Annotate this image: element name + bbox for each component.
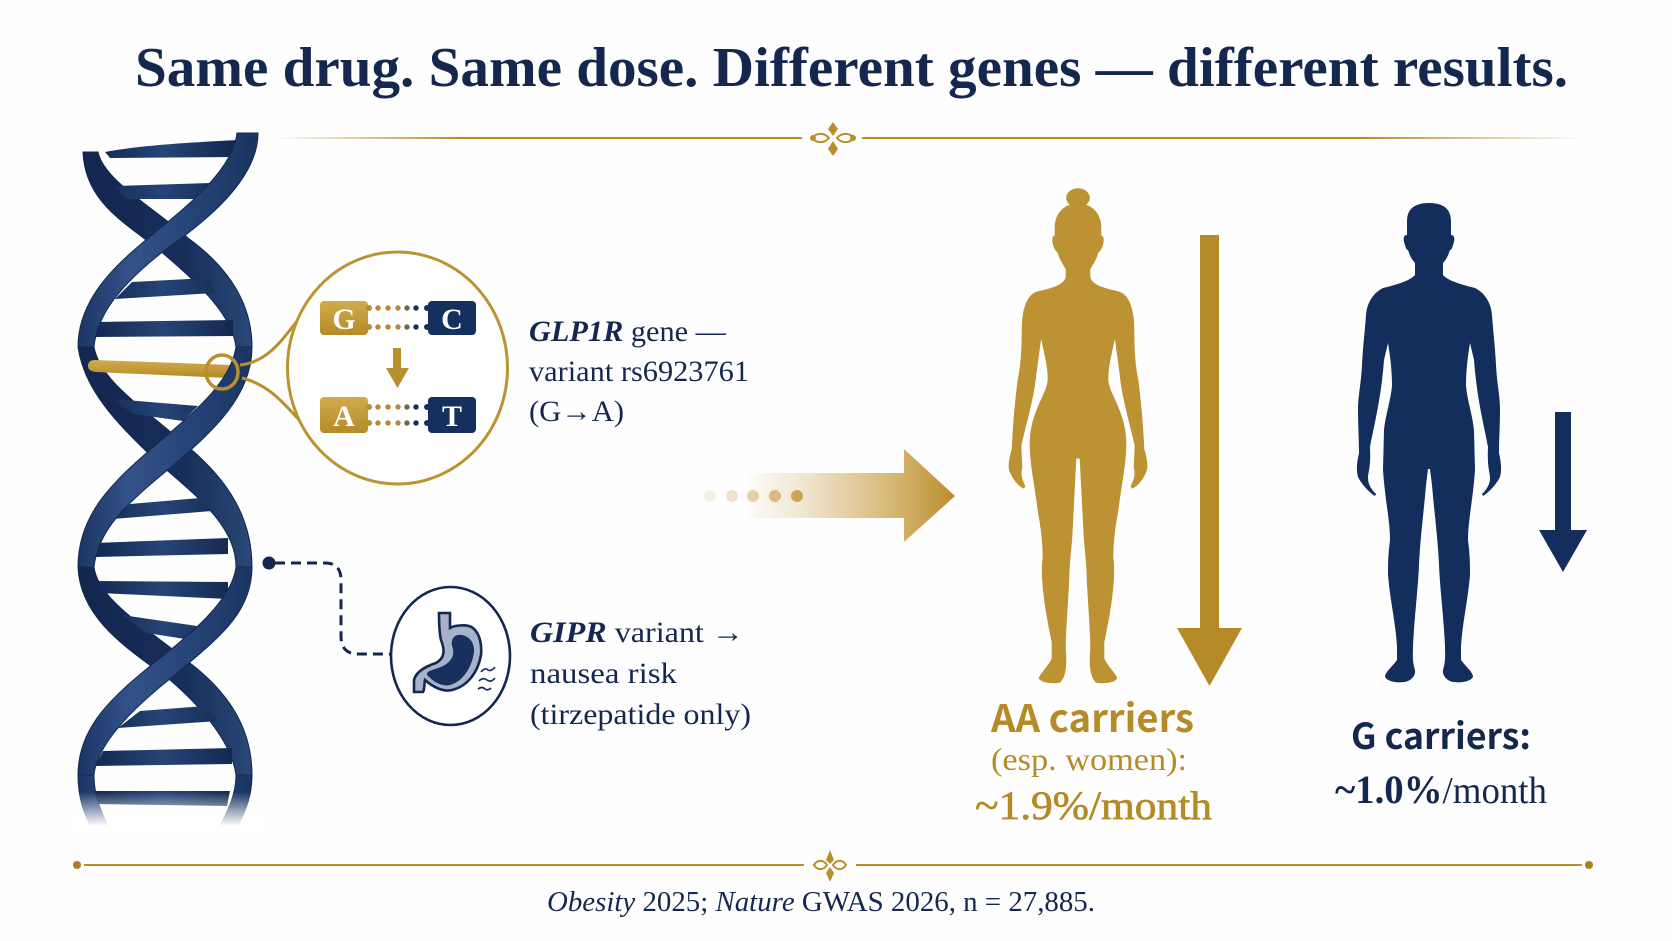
AA carriers label: (esp. women): xyxy=(991,741,1187,777)
base T: T xyxy=(442,400,462,433)
base C: C xyxy=(441,303,463,336)
AA carriers label xyxy=(975,688,1212,828)
top ornamental divider xyxy=(273,122,1585,156)
bottom fade xyxy=(70,792,265,832)
magnified base pair circle xyxy=(288,252,508,484)
rungs xyxy=(88,140,237,806)
base A xyxy=(320,397,372,433)
base C xyxy=(424,301,476,336)
base T xyxy=(424,397,476,433)
G carriers label: ~1.0%/month xyxy=(1335,767,1547,812)
GIPR variant text: nausea risk xyxy=(530,657,677,690)
title: Same drug. Same dose. Different genes — different results. xyxy=(135,37,1568,99)
icon: stomach with nausea xyxy=(391,587,510,725)
GLP1R variant text: variant rs6923761 xyxy=(529,355,749,388)
magnifier connector lines and ring xyxy=(206,315,302,423)
base G: G xyxy=(332,303,356,336)
G carriers label: G carriers: xyxy=(1351,708,1531,760)
gold down arrow xyxy=(1177,235,1242,686)
base A: A xyxy=(333,400,355,433)
GLP1R variant text: (G→A) xyxy=(529,395,624,428)
gold variant rung xyxy=(88,360,232,378)
GIPR variant text: (tirzepatide only) xyxy=(530,698,751,731)
female silhouette: AA carriers xyxy=(1009,189,1147,683)
AA carriers label: AA carriers xyxy=(990,688,1194,743)
G carriers label xyxy=(1335,708,1547,812)
AA carriers label: ~1.9%/month xyxy=(975,783,1212,828)
GIPR variant text xyxy=(530,616,751,731)
GLP1R variant text xyxy=(529,315,749,428)
back strands xyxy=(78,152,252,775)
navy down arrow xyxy=(1539,412,1587,572)
male silhouette: G carriers xyxy=(1357,203,1501,682)
bottom ornamental divider xyxy=(73,850,1593,882)
GIPR variant text: GIPR variant → xyxy=(530,616,744,649)
hydrogen bond dots xyxy=(375,305,419,426)
dashed connector to stomach xyxy=(262,556,391,654)
base G xyxy=(320,301,372,336)
DNA double helix xyxy=(70,133,265,832)
front strands xyxy=(78,133,258,830)
flow arrow with dots xyxy=(704,449,955,542)
mutation arrow xyxy=(386,348,409,388)
GLP1R variant text: GLP1R gene — xyxy=(529,315,727,348)
citation footer: Obesity 2025; Nature GWAS 2026, n = 27,885. xyxy=(547,887,1095,918)
